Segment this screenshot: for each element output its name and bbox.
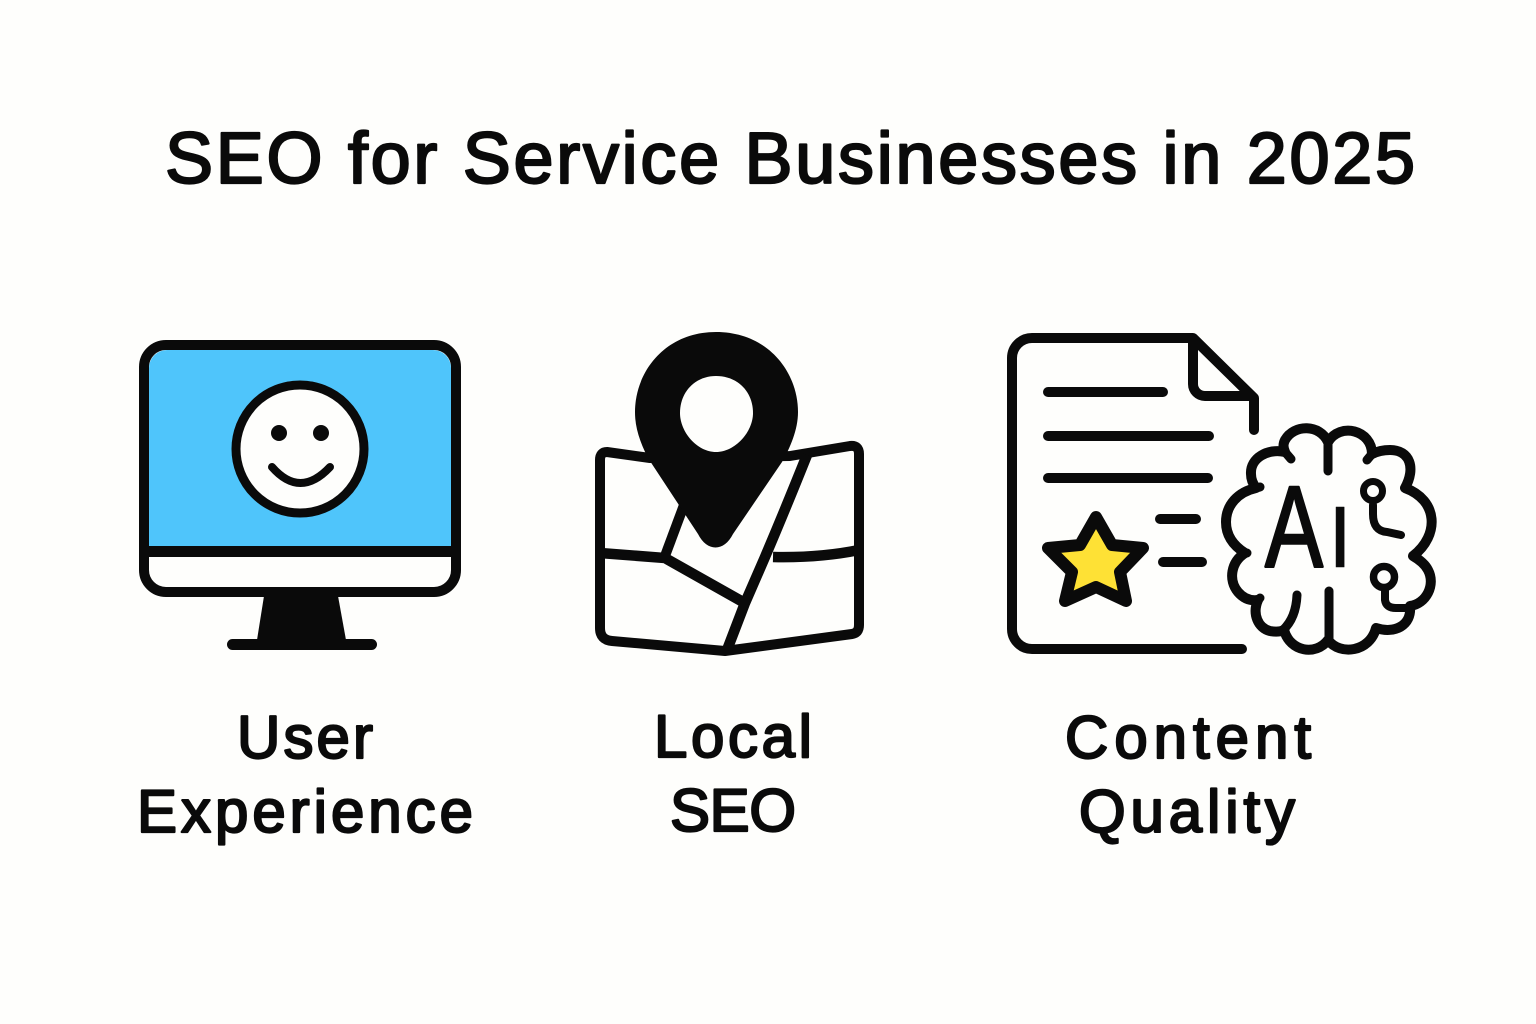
text: AI — [1265, 462, 1352, 592]
label: Local SEO: Local — [654, 703, 812, 770]
icon: monitor with smiley — [144, 345, 456, 650]
icon: yellow star — [1048, 517, 1143, 601]
label: Content Quality — [1065, 704, 1311, 845]
text: AI: A — [1265, 462, 1324, 592]
icon: map with location pin — [600, 332, 859, 651]
label: Local SEO — [654, 703, 812, 844]
title: SEO for Service Businesses in 2025 — [165, 119, 1415, 199]
text: AI: I — [1328, 489, 1352, 586]
label: User Experience — [137, 704, 473, 845]
label: Local SEO: SEO — [670, 777, 796, 844]
label: Content Quality: Content — [1065, 704, 1311, 771]
icon: document with star and AI brain — [1012, 338, 1432, 650]
label: User Experience: User — [237, 704, 373, 771]
label: User Experience: Experience — [137, 778, 473, 845]
label: Content Quality: Quality — [1079, 778, 1295, 845]
icon: AI brain — [1226, 428, 1432, 650]
